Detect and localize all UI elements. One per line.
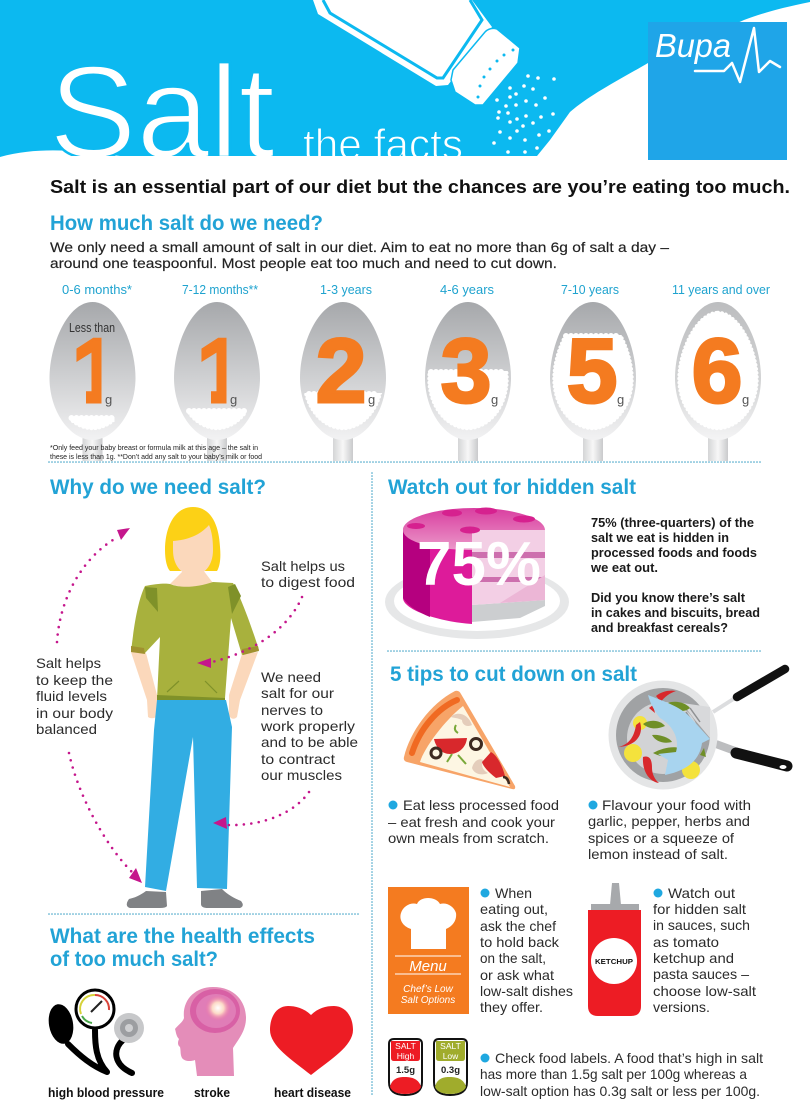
tip: flavour: Flavour your food with bbox=[602, 797, 751, 813]
text: nerves and muscles: our muscles bbox=[261, 767, 342, 783]
text: nerves and muscles: We need bbox=[261, 669, 321, 685]
hidden salt text: in cakes and biscuits, bread bbox=[591, 606, 760, 620]
hidden salt text: salt we eat is hidden in bbox=[591, 531, 729, 545]
icon: menu with chef hat: Salt Options bbox=[401, 995, 455, 1006]
heading: Watch out for hidden salt bbox=[388, 476, 636, 499]
tip: eating out bbox=[480, 885, 573, 1015]
tip: processed food bbox=[388, 797, 559, 846]
tip: food labels bbox=[480, 1050, 763, 1099]
text: fluid levels: to keep the bbox=[36, 672, 113, 688]
text: fluid levels: balanced bbox=[36, 721, 97, 737]
spoon: 6g bbox=[675, 302, 761, 461]
header banner bbox=[0, 0, 810, 157]
heading: What are the health effects bbox=[50, 925, 315, 948]
tip: flavour: garlic, pepper, herbs and bbox=[588, 813, 750, 829]
effect labels bbox=[48, 1085, 351, 1100]
body text: We only need a small amount of salt in our diet. Aim to eat no more than 6g of salt a day – bbox=[50, 239, 669, 255]
arrow: digest food bbox=[197, 597, 302, 668]
effect labels: high blood pressure bbox=[48, 1085, 164, 1100]
spoon: less than 1g: 1 bbox=[72, 321, 122, 422]
text: digest food: to digest food bbox=[261, 574, 355, 590]
section: five tips bbox=[388, 663, 787, 1099]
spoon: 1g: 1 bbox=[197, 321, 247, 422]
age labels: 7-10 years bbox=[561, 283, 619, 297]
tip: eating out: ask the chef bbox=[480, 918, 556, 934]
food label: low salt: Low bbox=[443, 1051, 459, 1061]
age labels: 0-6 months* bbox=[62, 283, 132, 297]
heading: Why do we need salt? bbox=[50, 476, 266, 499]
footnote bbox=[50, 443, 262, 461]
section: why do we need salt bbox=[36, 476, 358, 908]
food label: high salt bbox=[389, 1039, 422, 1095]
footnote: these is less than 1g. **Don’t add any salt to your baby’s milk or food bbox=[50, 452, 262, 461]
logo: Bupa: Bupa bbox=[655, 27, 731, 64]
tip: eating out: low-salt dishes bbox=[480, 983, 573, 999]
figure: woman bbox=[127, 507, 259, 908]
tip: sauces bbox=[653, 885, 756, 1015]
age labels: 7-12 months** bbox=[182, 283, 258, 297]
effect labels: stroke bbox=[194, 1085, 230, 1100]
title: Salt: Salt bbox=[49, 38, 275, 185]
tip: sauces: as tomato bbox=[653, 934, 719, 950]
hidden salt text: processed foods and foods bbox=[591, 546, 757, 560]
subtitle: the facts: the facts bbox=[303, 121, 463, 169]
tip: processed food: – eat fresh and cook your bbox=[388, 814, 555, 830]
spoon: less than 1g: Less than bbox=[69, 321, 115, 335]
salt shaker bbox=[313, 0, 520, 105]
spoon: 5g: g bbox=[617, 392, 624, 407]
tip: flavour: spices or a squeeze of bbox=[588, 830, 734, 846]
tip: sauces: in sauces, such bbox=[653, 917, 750, 933]
food label: low salt: SALT bbox=[440, 1041, 461, 1051]
falling salt bbox=[492, 74, 556, 154]
text: digest food: Salt helps us bbox=[261, 558, 345, 574]
text: nerves and muscles: to contract bbox=[261, 751, 335, 767]
body text bbox=[50, 239, 669, 271]
spoon: 3g: 3 bbox=[441, 321, 491, 422]
spoon: 5g bbox=[550, 302, 636, 461]
tip: processed food: Eat less processed food bbox=[403, 797, 559, 813]
text: nerves and muscles: salt for our bbox=[261, 685, 334, 701]
tip: eating out: or ask what bbox=[480, 967, 554, 983]
tip: flavour: lemon instead of salt. bbox=[588, 846, 728, 862]
tip: sauces: versions. bbox=[653, 999, 710, 1015]
tip: food labels: Check food labels. A food that’s high in salt bbox=[495, 1050, 763, 1066]
arrow: fluid levels up bbox=[57, 528, 130, 642]
arrow: nerves and muscles bbox=[213, 792, 309, 829]
heading: 5 tips to cut down on salt bbox=[390, 663, 637, 686]
spoon: 6g: g bbox=[742, 392, 749, 407]
text: nerves and muscles: nerves to bbox=[261, 702, 323, 718]
text: nerves and muscles: work properly bbox=[260, 718, 355, 734]
icon: head with stroke bbox=[175, 987, 246, 1076]
age labels: 11 years and over bbox=[672, 283, 770, 297]
food label: low salt bbox=[434, 1039, 467, 1095]
footnote: *Only feed your baby breast or formula milk at this age – the salt in bbox=[50, 443, 258, 452]
age labels: 1-3 years bbox=[320, 283, 372, 297]
cake illustration with 75% bbox=[385, 508, 569, 639]
spoon: 1g bbox=[174, 302, 260, 461]
spoon: less than 1g: g bbox=[105, 392, 112, 407]
hidden salt text: we eat out. bbox=[590, 561, 658, 575]
tip: eating out: eating out, bbox=[480, 901, 548, 917]
text: nerves and muscles bbox=[260, 669, 358, 783]
logo: Bupa bbox=[648, 22, 787, 160]
cake illustration with 75%: 75% bbox=[417, 530, 541, 599]
icon: heart bbox=[270, 1006, 353, 1075]
icon: ketchup bottle: KETCHUP bbox=[595, 957, 633, 966]
tip: food labels: has more than 1.5g salt per 100g whereas a bbox=[480, 1066, 747, 1082]
hidden salt text bbox=[590, 516, 760, 635]
hidden salt text: 75% (three-quarters) of the bbox=[591, 516, 754, 530]
spoon: 3g: g bbox=[491, 392, 498, 407]
spoon: 3g bbox=[425, 302, 511, 461]
hidden salt text: Did you know there’s salt bbox=[591, 591, 746, 605]
spoon: 2g: 2 bbox=[316, 321, 366, 422]
age labels bbox=[62, 283, 770, 297]
food label: high salt: High bbox=[397, 1051, 415, 1061]
section: hidden salt bbox=[385, 476, 760, 639]
icon: menu with chef hat: Chef’s Low bbox=[403, 984, 454, 995]
tip: eating out: on the salt, bbox=[480, 950, 546, 966]
text: digest food bbox=[261, 558, 355, 590]
tip: eating out: When bbox=[495, 885, 532, 901]
heading bbox=[50, 925, 315, 971]
tip: eating out: they offer. bbox=[480, 999, 543, 1015]
tip: sauces: pasta sauces – bbox=[653, 966, 749, 982]
tip: sauces: ketchup and bbox=[653, 950, 734, 966]
tip: flavour bbox=[588, 797, 751, 862]
heading: How much salt do we need? bbox=[50, 212, 323, 235]
section: how much salt do we need bbox=[50, 212, 770, 461]
spoon: 2g: g bbox=[368, 392, 375, 407]
body text: around one teaspoonful. Most people eat too much and need to cut down. bbox=[50, 255, 557, 271]
heading: of too much salt? bbox=[50, 948, 218, 971]
intro statement: Salt is an essential part of our diet but the chances are you’re eating too much. bbox=[50, 177, 790, 197]
section: health effects bbox=[46, 925, 353, 1100]
text: fluid levels bbox=[36, 655, 113, 737]
icon: menu with chef hat: Menu bbox=[409, 958, 447, 975]
tip: eating out: to hold back bbox=[480, 934, 560, 950]
spoon: less than 1g bbox=[50, 302, 136, 461]
icon: ketchup bottle bbox=[588, 883, 641, 1016]
age labels: 4-6 years bbox=[440, 283, 494, 297]
hidden salt text: and breakfast cereals? bbox=[591, 621, 728, 635]
icon: menu with chef hat bbox=[388, 887, 469, 1014]
icon: pizza slice bbox=[404, 691, 515, 789]
spoon: 1g: g bbox=[230, 392, 237, 407]
tip: processed food: own meals from scratch. bbox=[388, 830, 549, 846]
tip: sauces: choose low-salt bbox=[653, 983, 756, 999]
effect labels: heart disease bbox=[274, 1085, 351, 1100]
food label: high salt: 1.5g bbox=[396, 1065, 415, 1076]
text: fluid levels: fluid levels bbox=[36, 688, 107, 704]
spoon: 5g: 5 bbox=[567, 321, 617, 422]
icon: blood pressure monitor bbox=[46, 990, 144, 1073]
icon: frying pan with fish bbox=[608, 669, 787, 790]
food label: low salt: 0.3g bbox=[441, 1065, 460, 1076]
text: fluid levels: in our body bbox=[36, 705, 113, 721]
spoon: 2g bbox=[300, 302, 386, 461]
text: nerves and muscles: and to be able bbox=[261, 734, 358, 750]
spoon: 6g: 6 bbox=[692, 321, 742, 422]
food label: high salt: SALT bbox=[395, 1041, 416, 1051]
tip: sauces: Watch out bbox=[668, 885, 735, 901]
text: fluid levels: Salt helps bbox=[36, 655, 101, 671]
tip: sauces: for hidden salt bbox=[653, 901, 746, 917]
arrow: fluid levels down bbox=[69, 753, 142, 883]
tip: food labels: low-salt option has 0.3g salt or less per 100g. bbox=[480, 1083, 760, 1099]
